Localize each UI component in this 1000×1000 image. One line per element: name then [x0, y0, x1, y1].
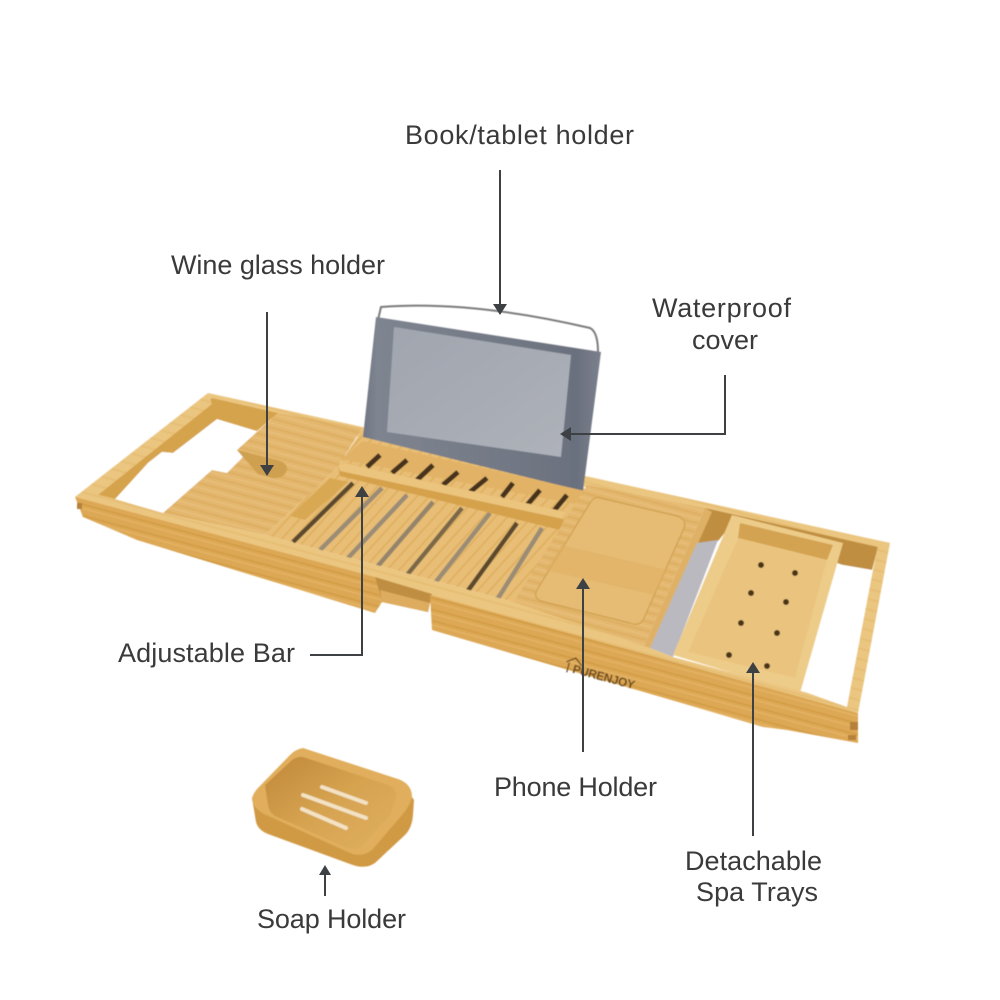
arrow: adjustable bar [310, 486, 369, 656]
board side edge [643, 508, 712, 650]
phone recess [536, 498, 685, 624]
left end opening [117, 420, 255, 513]
left frame side [75, 393, 212, 503]
adjustable cross bar [338, 463, 566, 530]
wine glass slot [237, 450, 287, 478]
right white opening [808, 565, 872, 706]
front face left [75, 497, 382, 613]
book stand fabric [363, 317, 601, 491]
arrow: waterproof cover [560, 375, 726, 441]
tray back rail [208, 393, 890, 552]
front rail top lip [75, 492, 858, 713]
side slot blocks [290, 478, 348, 520]
soap dish slots [302, 787, 366, 828]
right frame side [847, 543, 890, 713]
slat gaps [293, 483, 542, 600]
arrow: phone holder [576, 578, 590, 752]
book stand mesh [387, 327, 571, 457]
label: book/tablet holder: Book/tablet holder [405, 120, 634, 150]
arrow: wine glass holder [260, 312, 274, 476]
slatted centre bed [265, 430, 590, 603]
label: waterproof cover: Waterproof [652, 293, 791, 323]
front face right [430, 595, 858, 743]
right section back wall [697, 508, 878, 570]
soap holder [252, 748, 414, 867]
arrow: detachable spa trays [746, 662, 760, 836]
brand logo: PURENJOY [571, 662, 637, 692]
label: detachable spa trays: Spa Trays [696, 877, 818, 907]
book stand wire handle [378, 306, 598, 352]
arrow: soap holder [319, 865, 331, 896]
label: wine glass holder: Wine glass holder [171, 250, 385, 280]
bamboo bath tray [75, 306, 890, 743]
soap dish rim [252, 748, 412, 855]
label: soap holder: Soap Holder [257, 904, 406, 934]
phone holder board [513, 485, 705, 648]
label: adjustable bar: Adjustable Bar [118, 638, 295, 668]
soap dish basin [265, 757, 396, 849]
label: detachable spa trays: Detachable [685, 846, 822, 876]
soap dish body [252, 750, 414, 867]
detachable spa tray [673, 515, 843, 693]
wine holder board [163, 413, 362, 535]
label: detachable spa trays [685, 846, 822, 907]
sliding rail [375, 577, 432, 612]
left end inner wall [88, 398, 278, 499]
gray base under spa tray [650, 540, 718, 657]
label: phone holder: Phone Holder [494, 772, 657, 802]
label: waterproof cover: cover [692, 325, 758, 355]
upper ladder rails and slats [340, 441, 585, 505]
arrow: book/tablet holder [493, 170, 507, 315]
corner joints [77, 503, 858, 740]
drain holes [726, 562, 798, 669]
label: waterproof cover [652, 293, 791, 355]
